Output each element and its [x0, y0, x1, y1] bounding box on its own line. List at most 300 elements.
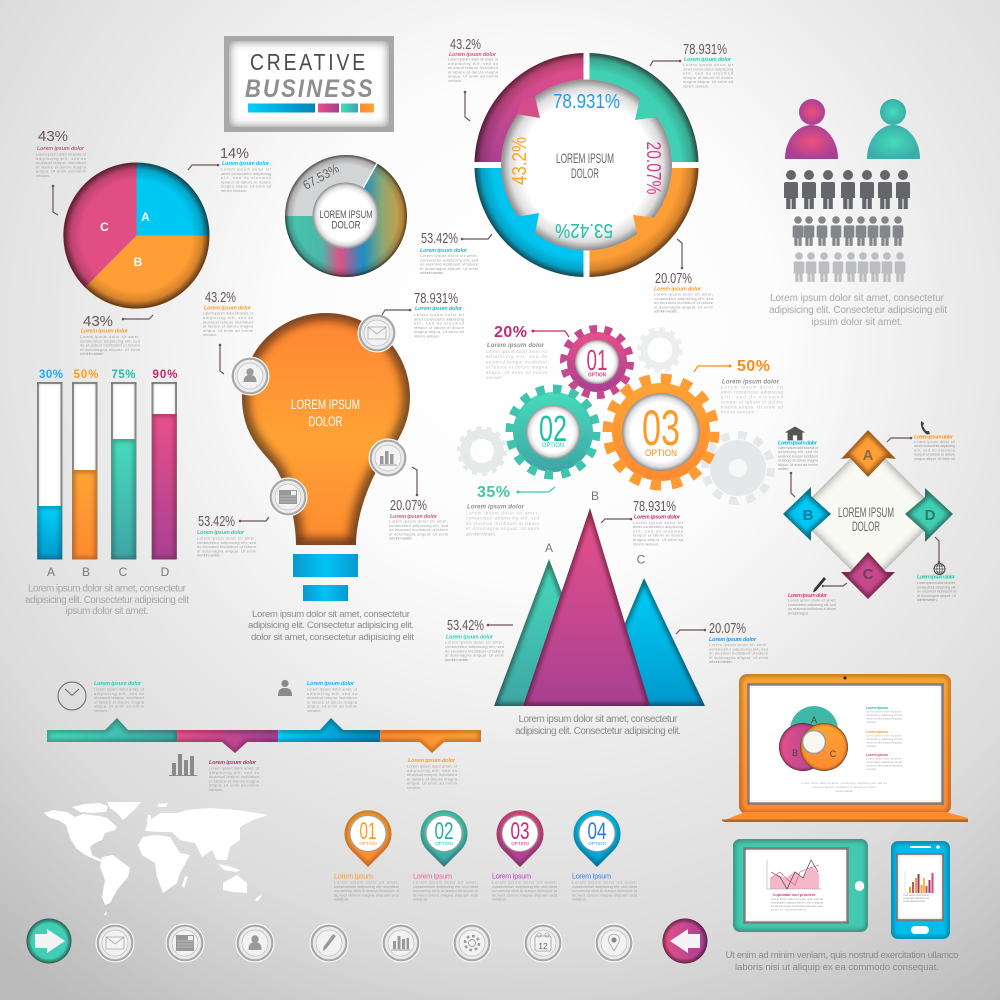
pin text 03 [492, 872, 558, 902]
triangle paragraph: adipisicing elit. Consectetur adipisicing elit. [515, 726, 681, 737]
timeline block: orange: Lorem ipsum dolor [408, 758, 456, 764]
callout: gear 35%: Lorem ipsum dolor [467, 504, 525, 510]
laptop screen text: eiusmod tempor incididunt ut labore et dolore [812, 785, 876, 789]
callout: triangle 20.07% [676, 621, 768, 664]
callout: pie 43% bottom: consectetur adipiscing elit, sed [80, 338, 140, 343]
pin text 04 [572, 872, 638, 902]
arrow C: C [863, 566, 874, 583]
callout: bulb 43.2%: adipiscing elit, sed do [203, 315, 253, 320]
arrow B [783, 487, 831, 541]
callout: pie 14%: Lorem ipsum dolor sit [221, 166, 272, 172]
bottom right paragraph [726, 950, 958, 973]
triangle chart [494, 489, 705, 706]
callout: triangle 53.42%: et dolomagna aliquat. Ut enim [445, 653, 504, 658]
callout: diamond pen: consectetur adipiscing elit, sed [788, 602, 836, 607]
timeline block: person: aliqua. Ut enim ad minim [307, 704, 357, 709]
title box: CREATIVE [250, 51, 365, 75]
callout: bulb 20.07%: consectetur adipiscing elit, sed [389, 523, 448, 528]
callout: ring 53.42% [420, 231, 492, 275]
pie chart: A [141, 210, 150, 224]
light bulb: DOLOR [308, 413, 342, 429]
diamond diagram: LOREM IPSUM [838, 505, 894, 520]
bar chart paragraph: Lorem ipsum dolor sit amet, consectetur [28, 584, 187, 594]
callout: gear 35%: 35% [477, 484, 510, 501]
callout: pie 43% top: ut labore et dolore magna [36, 164, 87, 169]
button: right arrow [26, 918, 72, 964]
triangle chart: B [591, 489, 599, 503]
callout: diamond globe: Lorem ipsum dolor sit amet, [917, 580, 956, 585]
callout: diamond home: veniam. [778, 466, 789, 471]
big ring chart: LOREM IPSUM [556, 150, 614, 166]
callout: ring 20.07%: et dolomagna aliquat. Ut enim [654, 304, 713, 309]
callout: bulb 78.931%: magna aliqua. Ut enim ad [414, 329, 464, 334]
bulb paragraph: Lorem ipsum dolor sit amet, consectetur [252, 609, 411, 620]
arrow B: B [803, 507, 814, 524]
pin text 02: Lorem Ipsum [413, 872, 452, 880]
callout: diamond home: eiusmod tempor incididunt [778, 453, 819, 458]
big ring chart: DOLOR [571, 165, 599, 181]
timeline block: chart: eiusmod tempor incididunt [209, 774, 260, 779]
pin text 02: laoreet dolore magna aliquam erat [413, 892, 479, 897]
callout: pie 14%: magna aliqua. Ut enim ad [221, 184, 271, 189]
button: left arrow [662, 918, 708, 964]
bar chart: 30% [39, 369, 63, 381]
timeline block: person: Lorem ipsum dolor [307, 681, 355, 687]
callout: ring 78.931%: tempor ut labore et dolore [683, 75, 733, 80]
laptop screen text: Lorem ipsum dolor sit amet, [866, 756, 902, 760]
bar chart: 90% [152, 369, 178, 381]
callout: pie 43% bottom: Lorem ipsum dolor sit amet, [80, 334, 140, 339]
pin text 01: volutpat. [334, 897, 349, 902]
icon: bar chart [369, 439, 407, 477]
callout: pie 43% bottom [80, 314, 153, 356]
timeline block: chart: aliqua. Ut enim ad minim [209, 783, 259, 788]
bulb base [293, 554, 358, 601]
icon: location [595, 924, 633, 962]
callout: ring 78.931%: minim veniam. [683, 84, 709, 88]
gear 02: 02 [539, 408, 567, 449]
callout: diamond home: adipiscing elit, sed do [778, 449, 818, 454]
callout: triangle 20.07%: do eiusmod incididunt ut labore [709, 651, 768, 656]
bulb paragraph: dolor sit amet, consectetur adipisicing elit [251, 632, 414, 643]
callout: pie 14%: 14% [220, 146, 249, 162]
venn diagram: C [830, 749, 837, 759]
pin text 03: volutpat. [492, 897, 507, 902]
pin 04: 04 [588, 818, 606, 845]
donut chart: LOREM IPSUM [320, 209, 372, 221]
callout: triangle 78.931%: elit, sed do eiusmod [633, 528, 683, 533]
callout: ring 20.07%: Lorem ipsum dolor [654, 286, 702, 292]
laptop screen text: magna aliqua. [835, 789, 853, 793]
callout: diamond globe: et dolomagna aliquat. Ut [917, 593, 957, 598]
callout: bulb 53.42%: 53.42% [198, 514, 235, 530]
timeline block: clock: aliqua. Ut enim ad minim [94, 704, 144, 709]
callout: ring 20.07%: 20.07% [655, 271, 692, 287]
callout: gear 20% [486, 324, 569, 380]
big ring chart: 20.07% [642, 141, 664, 195]
laptop screen text: Lorem Ipsum [866, 706, 889, 710]
callout: gear 35% [466, 484, 555, 536]
laptop screen text: consectetuer adipiscing elit sed [866, 760, 902, 764]
callout: ring 53.42%: Lorem ipsum dolor [420, 248, 468, 254]
title box: BUSINESS [245, 75, 373, 102]
callout: gear 50%: magna aliqua. Ut enim ad [721, 404, 784, 410]
pin 04: OPTION [588, 841, 606, 846]
callout: pie 14%: minim veniam. [221, 188, 247, 193]
callout: gear 20%: ut labore et dolore magna [486, 365, 548, 370]
callout: bulb 53.42% [197, 514, 269, 558]
timeline block: orange: Lorem ipsum dolor amet, ut [407, 764, 458, 768]
callout: ring 20.07% [654, 239, 713, 314]
people paragraph: adipisicing elit. Consectetur adipisicing elit [769, 305, 947, 316]
laptop screen text: volutpat [866, 744, 876, 748]
callout: triangle 78.931% [601, 499, 684, 546]
gear 01: OPTION [588, 372, 606, 378]
callout: ring 53.42%: ad minim veniam. [420, 270, 444, 275]
callout: ring 43.2% [448, 37, 499, 121]
icon: envelope [358, 314, 396, 352]
pin text 04: Lorem Ipsum [572, 872, 611, 880]
icon: user [231, 357, 269, 395]
callout: pie 14%: amet consectetur adipiscing [221, 171, 271, 176]
callout: gear 50%: Lorem ipsum dolor [722, 380, 780, 386]
callout: gear 35%: do eiusmod incididunt ut labore [466, 521, 540, 526]
callout: diamond phone: elit, sed do eiusmod [914, 447, 955, 452]
laptop screen text: volutpat [866, 767, 876, 771]
callout: gear 20%: veniam. [486, 375, 503, 380]
pin text 04: laoreet dolore magna aliquam erat [572, 892, 638, 897]
people paragraph: ipsum dolor sit amet. [812, 317, 902, 328]
callout: ring 53.42%: do eiusmod incididunt ut labore [420, 262, 478, 267]
timeline block: clock: ut labore et dolore magna [94, 699, 145, 704]
bottom right paragraph: laboris nisi ut aliquip ex ea commodo consequat. [735, 962, 939, 973]
pin 03: 03 [510, 818, 530, 845]
callout: gear 50%: amet consectetur adipiscing [721, 390, 784, 394]
callout: triangle 78.931%: 78.931% [633, 499, 676, 515]
venn diagram: A [811, 715, 817, 725]
laptop screen text: consectetuer adipiscing elit sed [866, 713, 902, 717]
callout: bulb 53.42%: do eiusmod incididunt ut labore [197, 544, 256, 549]
pin 03 [497, 810, 544, 867]
timeline block: orange: eiusmod tempor incididunt [407, 772, 458, 777]
laptop screen text: Lorem ipsum dolor sit amet, [866, 710, 902, 714]
light bulb: LOREM IPSUM [291, 396, 360, 412]
callout: diamond phone: Lorem ipsum dolor sit [914, 439, 956, 444]
callout: diamond globe: consectetur adipiscing elit, [917, 584, 956, 589]
venn diagram [779, 706, 848, 771]
pin text 04: volutpat. [572, 897, 587, 902]
callout: pie 43% bottom: ad minim veniam. [80, 351, 104, 356]
timeline block: chart: ut labore et dolore magna [209, 778, 260, 783]
callout: ring 20.07%: ad minim veniam. [654, 309, 678, 314]
tablet: Cupidatat non proident [772, 892, 816, 897]
arrow A: A [863, 447, 874, 464]
diamond diagram [783, 430, 953, 599]
callout: bulb 53.42%: consectetur adipiscing elit, sed [197, 540, 256, 545]
icon: calendar [524, 924, 562, 962]
laptop screen text: Lorem ipsum dolor sit amet, [866, 734, 902, 738]
venn diagram: B [792, 748, 798, 758]
callout: ring 43.2%: veniam. [448, 78, 462, 83]
pin 04 [574, 810, 620, 867]
callout: pie 43% top [36, 129, 87, 215]
pin 01: OPTION [359, 841, 377, 846]
timeline block: orange [407, 758, 458, 790]
pin text 02: consectetuer adipiscing elit, sed diam [413, 884, 478, 889]
callout: triangle 78.931%: Lorem ipsum dolor [634, 514, 681, 520]
phone: consectetur adipiscing elit [903, 897, 929, 900]
bulb paragraph [248, 609, 414, 643]
callout: triangle 78.931%: amet consectetur adipiscing [633, 524, 683, 529]
people paragraph: Lorem ipsum dolor sit amet, consectetur [770, 293, 945, 304]
timeline block: clock [58, 681, 145, 713]
pin text 03: laoreet dolore magna aliquam erat [492, 892, 558, 897]
pin 02: OPTION [435, 841, 453, 846]
callout: bulb 53.42%: ad minim veniam. [197, 553, 221, 558]
callout: ring 53.42%: consectetur adipiscing elit, sed [420, 257, 478, 262]
callout: gear 20%: aliqua. Ut enim ad minim [486, 370, 547, 375]
arrow C [841, 552, 895, 599]
pin text 04: consectetuer adipiscing elit, sed diam [572, 884, 637, 889]
callout: bulb 78.931%: Lorem ipsum dolor sit [414, 312, 465, 317]
bottom right paragraph: Ut enim ad minim veniam, quis nostrud exercitation ullamco [726, 950, 958, 961]
timeline block: chart: adipiscing elit, sed do [209, 770, 259, 775]
laptop screen text: Lorem Ipsum [866, 753, 889, 757]
callout: diamond pen [788, 577, 847, 615]
laptop screen text: nonummy nibh euismod tincidunt [866, 740, 902, 744]
phone bar chart [905, 871, 937, 893]
people paragraph [769, 293, 947, 328]
callout: triangle 53.42%: consectetur adipiscing elit, sed [445, 644, 504, 649]
gear 02: OPTION [542, 442, 564, 449]
laptop screen text: nonummy nibh euismod tincidunt [866, 764, 902, 768]
callout: gear 20%: adipiscing elit, sed do [486, 354, 548, 359]
timeline block: clock: eiusmod tempor incididunt [94, 695, 145, 700]
icon: settings [453, 924, 491, 962]
callout: pie 43% bottom: do eiusmod incididunt ut labore [80, 343, 140, 348]
callout: ring 53.42%: 53.42% [421, 231, 458, 247]
icon: calendar: 12 [538, 941, 548, 951]
callout: ring 53.42%: et dolomagna aliquat. Ut enim [420, 266, 478, 271]
callout: bulb 43.2% [203, 290, 254, 374]
callout: diamond globe [917, 537, 957, 602]
callout: ring 20.07%: Lorem ipsum dolor sit amet, [654, 292, 713, 296]
callout: bulb 43.2%: eiusmod tempor incididunt [203, 319, 254, 324]
icon: user [236, 924, 274, 962]
pin 03: OPTION [511, 841, 529, 846]
callout: bulb 78.931%: tempor ut labore et dolore [414, 325, 464, 330]
callout: pie 43% bottom: 43% [83, 314, 113, 330]
people icons [784, 99, 920, 282]
callout: diamond pen: Lorem ipsum dolor sit amet, [788, 598, 836, 602]
timeline block: orange: ut labore et dolore magna [407, 776, 458, 781]
laptop screen text: consectetuer adipiscing elit sed [866, 737, 902, 741]
laptop screen text: nonummy nibh euismod tincidunt [866, 716, 902, 720]
callout: bulb 43.2%: veniam. [203, 332, 217, 337]
timeline block: orange: veniam. [407, 785, 421, 790]
big ring chart [474, 53, 698, 277]
tablet: ex ea commodo consequat duis aute irure [771, 904, 823, 908]
callout: bulb 20.07%: et dolomagna aliquat. Ut enim [389, 531, 448, 536]
callout: triangle 53.42%: do eiusmod incididunt ut labore [445, 648, 504, 653]
timeline block: chart: Lorem ipsum dolor amet, ut [209, 766, 260, 770]
tablet [733, 839, 868, 932]
pin 02: 02 [434, 818, 454, 845]
pin text 02: nonummy nibh euismod tincidunt ut [413, 888, 479, 893]
bar chart: C [119, 565, 128, 579]
callout: ring 78.931%: magna aliqua. Ut enim ad [683, 79, 733, 84]
callout: ring 43.2%: Lorem ipsum dolor [449, 52, 497, 58]
callout: ring 43.2%: ut labore et dolore magna [448, 69, 499, 74]
pin text 01: Lorem Ipsum [334, 872, 373, 880]
icon: news [166, 924, 204, 962]
pie chart: C [100, 220, 109, 234]
callout: pie 43% bottom: Lorem ipsum dolor [81, 328, 129, 334]
callout: bulb 78.931%: 78.931% [414, 291, 458, 307]
timeline block: orange: aliqua. Ut enim ad minim [407, 781, 457, 786]
pin 01 [345, 810, 392, 867]
timeline block: chart [169, 754, 260, 792]
icon: chart [382, 924, 420, 962]
callout: diamond home: aliqua. Ut enim ad minim [778, 462, 818, 467]
callout: diamond home [778, 427, 819, 497]
callout: gear 20%: eiusmod tempor incididunt [486, 359, 548, 364]
timeline block: person: ut labore et dolore magna [307, 699, 358, 704]
phone: sed do eiusmod tempor [903, 900, 925, 903]
tablet: exercitation ullamco laboris nisi ut aliquip [771, 900, 823, 904]
callout: pie 14%: tempor ut labore et dolore [221, 179, 271, 184]
pin text 01: Lorem ipsum dolor sit amet, [334, 880, 399, 884]
pin text 04: nonummy nibh euismod tincidunt ut [572, 888, 638, 893]
timeline block: person: adipiscing elit, sed do [307, 691, 357, 696]
gear 03: OPTION [645, 448, 677, 459]
callout: diamond home: Lorem ipsum dolor [778, 440, 818, 446]
timeline block: clock: veniam. [94, 708, 108, 713]
pin text 03: Lorem ipsum dolor sit amet, [492, 880, 557, 884]
icon: pen [310, 924, 348, 962]
callout: ring 78.931%: Lorem ipsum dolor [684, 57, 732, 63]
callout: gear 35%: et dolomagna aliquat. Ut enim [466, 526, 539, 531]
bar chart [38, 369, 178, 579]
pin text 03: consectetuer adipiscing elit, sed diam [492, 884, 557, 889]
triangle chart: C [637, 552, 646, 566]
callout: bulb 20.07%: do eiusmod incididunt ut labore [389, 527, 448, 532]
donut chart: DOLOR [332, 220, 361, 232]
callout: diamond home: ut labore et dolore magna [778, 458, 819, 463]
callout: gear 50%: minim veniam. [721, 410, 756, 414]
callout: pie 43% bottom: et dolomagna aliquat. Ut enim [80, 347, 140, 352]
callout: diamond globe: Lorem ipsum dolor [917, 574, 956, 580]
callout: diamond phone: Lorem ipsum dolor [914, 434, 954, 440]
gear 01: 01 [586, 345, 608, 377]
callout: gear 35%: ad minim veniam. [466, 531, 496, 536]
callout: bulb 78.931%: Lorem ipsum dolor [415, 306, 463, 312]
timeline block: orange: adipiscing elit, sed do [407, 768, 457, 773]
callout: gear 35%: Lorem ipsum dolor sit amet, [466, 510, 539, 516]
callout: gear 20%: 20% [494, 324, 527, 341]
callout: bulb 20.07%: ad minim veniam. [389, 536, 413, 541]
callout: ring 43.2%: 43.2% [450, 37, 481, 53]
callout: bulb 53.42%: Lorem ipsum dolor sit amet, [197, 536, 256, 540]
pie chart: B [134, 255, 143, 269]
bar chart paragraph [25, 584, 189, 617]
gear 02 [510, 389, 596, 475]
callout: bulb 43.2%: 43.2% [205, 290, 236, 306]
callout: ring 78.931% [650, 42, 734, 88]
callout: triangle 78.931%: minim veniam. [633, 541, 659, 546]
timeline block: person: Lorem ipsum dolor amet, ut [307, 686, 358, 692]
callout: bulb 43.2%: Lorem ipsum dolor [204, 306, 252, 312]
callout: bulb 20.07% [389, 467, 448, 541]
pin text 03: Lorem Ipsum [492, 872, 531, 880]
laptop [722, 674, 968, 822]
timeline block: chart: veniam. [209, 787, 223, 792]
callout: triangle 20.07%: consectetur adipiscing elit, sed [709, 646, 768, 651]
world map [44, 802, 268, 915]
triangle paragraph: Lorem ipsum dolor sit amet, consectetur [518, 714, 678, 725]
callout: gear 50%: elit, sed do eiusmod [721, 394, 784, 400]
callout: gear 50%: tempor ut labore et dolore [721, 400, 784, 404]
callout: triangle 20.07%: ad minim veniam. [709, 659, 733, 664]
tablet: dolor in reprehenderit [771, 908, 806, 912]
callout: pie 43% top: aliqua. Ut enim ad minim [36, 169, 86, 174]
callout: ring 78.931%: 78.931% [683, 42, 727, 58]
callout: ring 78.931%: amet consectetur adipiscing [683, 66, 733, 71]
laptop screen text: Lorem ipsum dolor sit amet, consectetur adipiscing elit, sed do [802, 781, 887, 785]
callout: triangle 53.42% [445, 618, 513, 662]
bar chart paragraph: adipisicing elit. Consectetur adipisicing elit [25, 595, 189, 606]
callout: triangle 78.931%: tempor ut labore et dolore [633, 533, 683, 538]
callout: pie 14%: elit, sed do eiusmod [221, 175, 271, 180]
gear 03: 03 [642, 400, 680, 456]
bar chart: 75% [112, 369, 136, 381]
icon: newspaper [269, 478, 307, 516]
callout: ring 43.2%: aliqua. Ut enim ad minim [448, 74, 498, 79]
pin text 01: nonummy nibh euismod tincidunt ut [334, 888, 400, 893]
laptop screen text: volutpat [866, 720, 876, 724]
callout: bulb 20.07%: Lorem ipsum dolor [390, 514, 438, 520]
big ring chart: 53.42% [555, 219, 613, 241]
laptop screen text [802, 706, 902, 793]
phone [891, 841, 950, 939]
callout: bulb 78.931%: minim veniam. [414, 334, 440, 338]
pin text 01: laoreet dolore magna aliquam erat [334, 892, 400, 897]
pie chart [63, 162, 210, 309]
pin text 02 [413, 872, 479, 902]
callout: gear 35%: consectetur adipiscing elit, sed [466, 516, 540, 521]
big ring chart: 78.931% [553, 91, 620, 113]
big ring chart: 43.2% [509, 137, 531, 185]
callout: triangle 20.07%: Lorem ipsum dolor [709, 637, 757, 643]
background gears [460, 330, 771, 501]
pin 02 [420, 810, 467, 867]
pin 01: 01 [360, 818, 376, 845]
callout: diamond phone [887, 421, 956, 461]
light bulb [231, 313, 410, 601]
callout: ring 20.07%: consectetur adipiscing elit, sed [654, 296, 713, 301]
phone: Lorem ipsum dolor sit amet [903, 894, 929, 897]
callout: bulb 78.931%: elit, sed do eiusmod [414, 321, 464, 326]
timeline block: chart: Lorem ipsum dolor [209, 760, 257, 766]
callout: pie 43% top: eiusmod tempor incididunt [36, 160, 87, 165]
callout: diamond home: Lorem ipsum dolor sit amet, ut [778, 445, 819, 450]
callout: diamond pen: Lorem ipsum dolor [788, 593, 828, 599]
tablet: Lorem ipsum dolor sit amet, quis nostrud [771, 897, 823, 901]
callout: diamond phone: amet consectetur adipiscing [914, 443, 955, 448]
callout: bulb 78.931%: amet consectetur adipiscing [414, 316, 464, 321]
callout: ring 20.07%: do eiusmod incididunt ut labore [654, 300, 713, 305]
diamond diagram: DOLOR [852, 519, 880, 534]
